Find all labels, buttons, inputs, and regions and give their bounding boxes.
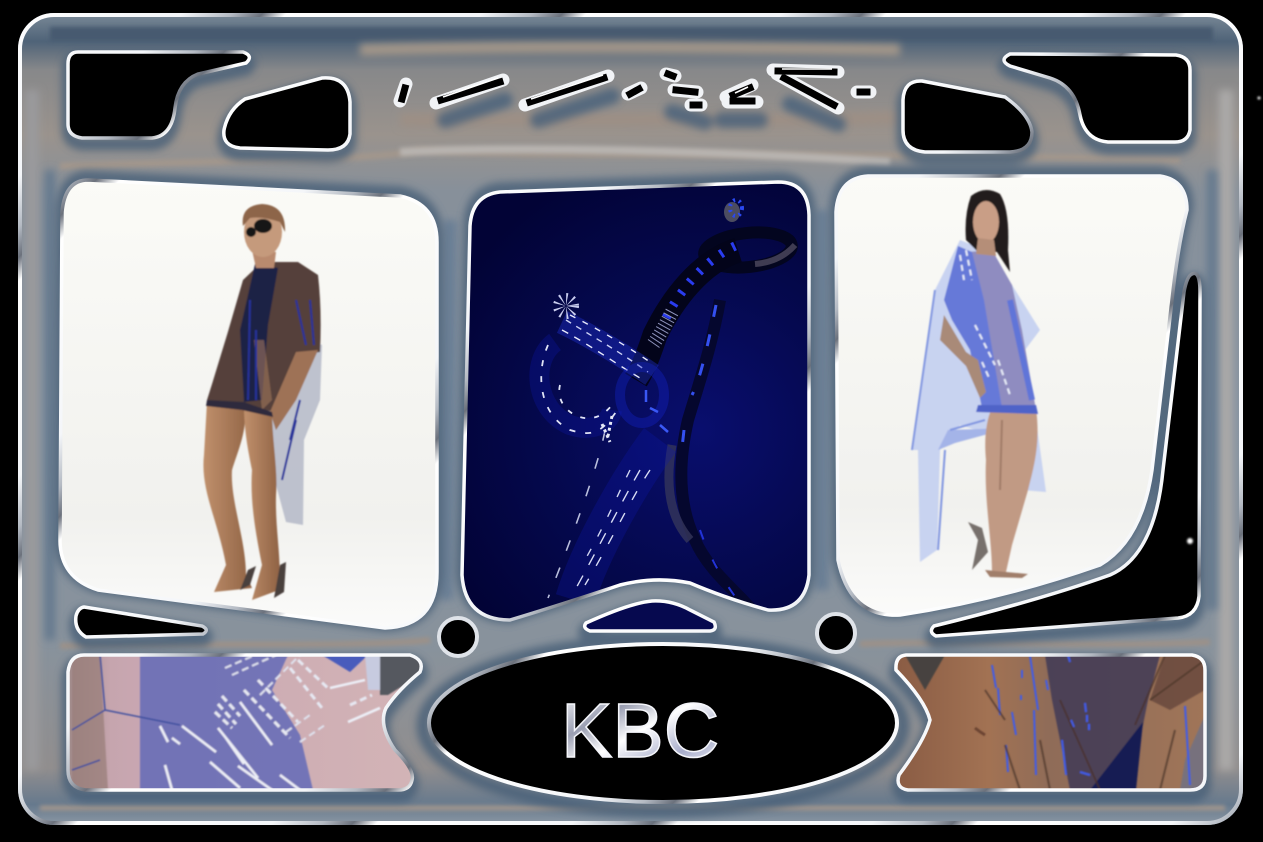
blue sculpture bbox=[539, 200, 795, 608]
right model bbox=[912, 190, 1046, 578]
small center navy window bbox=[585, 601, 715, 631]
right photo bbox=[836, 176, 1187, 615]
fabric and blue threads bbox=[905, 655, 1205, 790]
top-right inner window bbox=[903, 81, 1032, 152]
sparkle glints bbox=[1187, 96, 1260, 544]
left ring bbox=[439, 618, 477, 656]
bottom-left detail image bbox=[68, 655, 425, 790]
glyph highlights bbox=[443, 69, 832, 99]
top-right window bbox=[1004, 54, 1190, 142]
top-left inner window bbox=[224, 78, 350, 150]
glyph halos bbox=[400, 70, 870, 108]
chrome glyph row bbox=[400, 69, 870, 124]
top-left window bbox=[68, 52, 249, 138]
left photo bbox=[60, 180, 437, 628]
center panel bbox=[462, 182, 809, 620]
bottom-right detail image bbox=[896, 655, 1205, 790]
black oval badge bbox=[429, 644, 897, 802]
left model bbox=[203, 204, 322, 600]
right black wedge window bbox=[931, 273, 1200, 636]
glyph cores bbox=[402, 71, 867, 105]
lower-left wedge window bbox=[76, 607, 206, 637]
KBC logo text: KBC bbox=[561, 688, 719, 774]
fabric detail bbox=[72, 655, 425, 790]
glyph shadows bbox=[445, 96, 838, 124]
right ring bbox=[817, 614, 855, 652]
